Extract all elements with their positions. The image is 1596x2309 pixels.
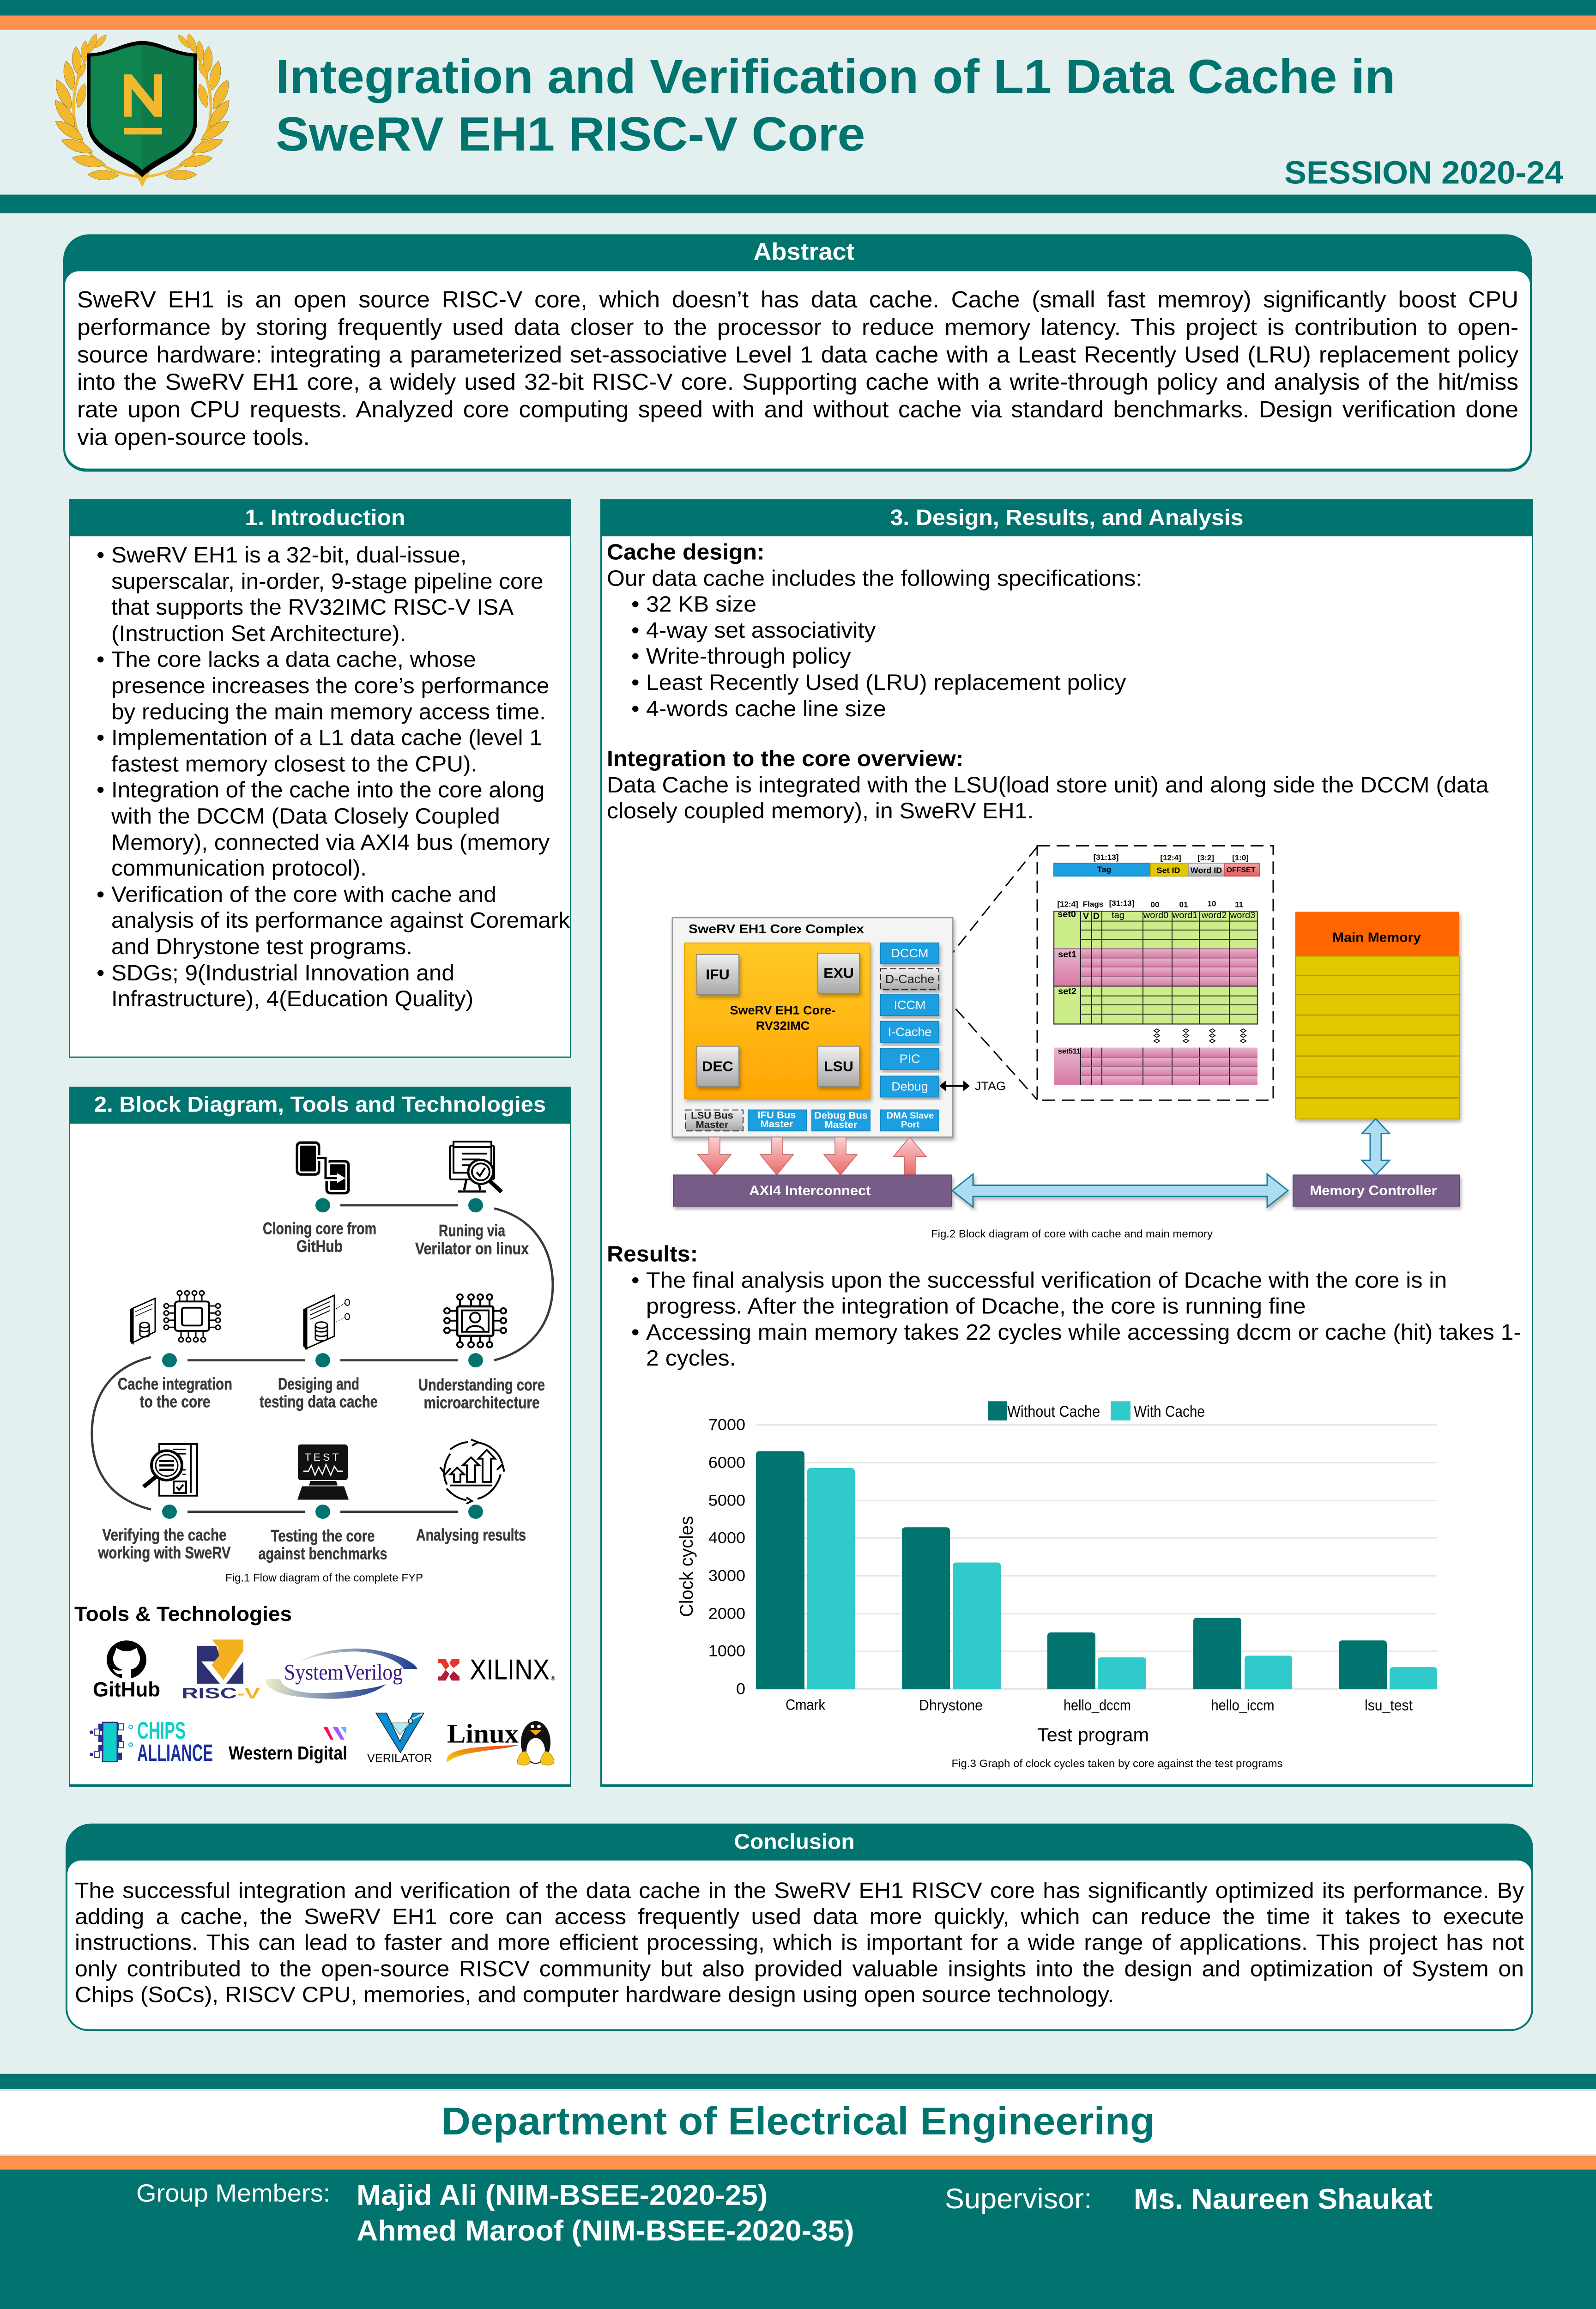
results text: Accessing main memory takes 22 cycles while accessing dccm or cache (hit) takes 1- bbox=[646, 1320, 1521, 1345]
functional units: EXU bbox=[823, 965, 854, 981]
bus master blocks bbox=[686, 1109, 939, 1131]
functional units: DEC bbox=[702, 1058, 733, 1074]
results text: The final analysis upon the successful verification of Dcache with the core is in bbox=[646, 1268, 1447, 1293]
logo: Verilator bbox=[367, 1713, 432, 1765]
cache address fields: Flags bbox=[1083, 900, 1103, 908]
cache table: set0 to set2: word2 bbox=[1201, 910, 1227, 920]
flow step labels: Verifying the cache bbox=[102, 1526, 226, 1544]
cache address fields: [12:4] bbox=[1057, 900, 1078, 908]
cache design text: Write-through policy bbox=[646, 644, 851, 669]
design heading: 3. Design, Results, and Analysis bbox=[890, 505, 1244, 530]
logo: CHIPS Alliance bbox=[90, 1717, 213, 1766]
block diagram heading bbox=[69, 1087, 571, 1124]
y axis labels: 5000 bbox=[708, 1492, 745, 1510]
cache table: set0 to set2: tag bbox=[1112, 910, 1124, 920]
introduction bullet list: and Dhrystone test programs. bbox=[111, 934, 412, 959]
integration overview text bbox=[607, 746, 1488, 824]
title: Integration and Verification of L1 Data Cache in bbox=[276, 49, 1395, 103]
logo: Verilator: VERILATOR bbox=[367, 1752, 432, 1765]
department title: Department of Electrical Engineering bbox=[441, 2099, 1155, 2143]
supervisor label: Supervisor: bbox=[945, 2183, 1092, 2215]
header band bbox=[0, 0, 1596, 213]
caption: figure 2: Fig.2 Block diagram of core with cache and main memory bbox=[931, 1228, 1213, 1239]
panel: 1. introduction bbox=[69, 499, 571, 1058]
cache address fields bbox=[1054, 853, 1259, 909]
logo: CHIPS Alliance: ALLIANCE bbox=[137, 1740, 213, 1766]
abstract text: source hardware: integrating a parameterized set-associative Level 1 data cache with a Least Recently Used (LRU) replacement policy bbox=[77, 342, 1518, 368]
x axis title: Test program bbox=[1037, 1724, 1149, 1745]
x axis labels: hello_dccm bbox=[1064, 1697, 1131, 1714]
bars: without cache bbox=[756, 1451, 1387, 1689]
introduction bullet list: that supports the RV32IMC RISC-V ISA bbox=[111, 595, 514, 620]
introduction bullet list: communication protocol). bbox=[111, 856, 367, 881]
bus master blocks: Port bbox=[901, 1120, 919, 1130]
bars: with cache bbox=[807, 1468, 1437, 1689]
cache design text: 4-words cache line size bbox=[646, 696, 886, 721]
footer bbox=[0, 2074, 1596, 2309]
cache address fields: 00 bbox=[1151, 901, 1159, 909]
results text: 2 cycles. bbox=[646, 1346, 736, 1371]
conclusion text: only contributed to the open-source RISCV community but also provided valuable insights into the design and optimization of System on bbox=[75, 1956, 1524, 1981]
introduction bullet list: Memory), connected via AXI4 bus (memory bbox=[111, 830, 550, 854]
cache table: set0 to set2 bbox=[1054, 909, 1257, 1024]
functional units: IFU bbox=[706, 967, 730, 983]
cache table: set0 to set2: set0 bbox=[1058, 909, 1076, 919]
core complex box: SweRV EH1 Core Complex bbox=[689, 922, 864, 936]
AXI4 interconnect block: AXI4 Interconnect bbox=[749, 1183, 871, 1198]
flow step labels: Cache integration bbox=[118, 1375, 232, 1393]
cache address fields: 01 bbox=[1179, 901, 1188, 909]
cache design text: Cache design: bbox=[607, 539, 765, 564]
header bottom teal bar bbox=[0, 194, 1596, 213]
tool logos bbox=[69, 1626, 568, 1773]
conclusion text bbox=[75, 1876, 1524, 2010]
memory and peripheral blocks: ICCM bbox=[894, 998, 925, 1012]
legend: With Cache bbox=[1134, 1402, 1205, 1420]
block diagram: core with cache and main memory bbox=[665, 837, 1478, 1247]
flow diagram bbox=[69, 1127, 568, 1586]
arrows: bus masters to AXI4 bbox=[698, 1137, 926, 1175]
abstract text: SweRV EH1 is an open source RISC-V core, which doesn’t has data cache. Cache (small fast memroy) significantly boost CPU bbox=[77, 286, 1518, 312]
abstract text bbox=[77, 285, 1518, 451]
results text: Results: bbox=[607, 1241, 698, 1266]
introduction bullet list: The core lacks a data cache, whose bbox=[111, 647, 476, 672]
cache address fields: [3:2] bbox=[1197, 853, 1214, 862]
introduction heading bbox=[69, 499, 571, 536]
department title box bbox=[0, 2091, 1596, 2156]
abstract body box bbox=[65, 271, 1530, 469]
icon: test monitor bbox=[297, 1445, 349, 1499]
x axis labels bbox=[786, 1697, 1413, 1714]
memory and peripheral blocks: Debug bbox=[891, 1080, 928, 1093]
introduction bullet list: analysis of its performance against Coremark bbox=[111, 908, 570, 933]
flow step labels: Testing the core bbox=[271, 1526, 375, 1545]
arrow: JTAG bbox=[939, 1079, 1006, 1093]
flow step labels: microarchitecture bbox=[423, 1393, 539, 1412]
memory and peripheral blocks: I-Cache bbox=[888, 1025, 931, 1039]
logo: CHIPS Alliance: CHIPS bbox=[137, 1717, 186, 1744]
department band bbox=[0, 2089, 1596, 2091]
y axis labels: 0 bbox=[736, 1680, 745, 1698]
bus master blocks: Debug Bus bbox=[814, 1110, 868, 1121]
introduction bullet list bbox=[111, 543, 570, 1012]
memory and peripheral blocks bbox=[881, 943, 939, 1097]
flow step labels: testing data cache bbox=[260, 1392, 378, 1411]
arrow: JTAG: JTAG bbox=[975, 1079, 1006, 1093]
flow connectors bbox=[92, 1205, 553, 1512]
cache address fields: [1:0] bbox=[1232, 853, 1249, 862]
cache table: set0 to set2: set2 bbox=[1058, 986, 1076, 997]
flow step labels: Verilator on linux bbox=[415, 1239, 529, 1258]
dashed zoom callout lines bbox=[943, 846, 1273, 1100]
logo: Linux: Linux bbox=[447, 1718, 519, 1748]
y axis labels: 3000 bbox=[708, 1567, 745, 1585]
panel: abstract bbox=[63, 234, 1532, 471]
cache design text: 4-way set associativity bbox=[646, 618, 876, 643]
logo: Western Digital bbox=[229, 1727, 347, 1764]
cache address fields: 11 bbox=[1235, 901, 1243, 909]
bus master blocks: LSU Bus bbox=[691, 1110, 733, 1121]
memory and peripheral blocks: D-Cache bbox=[885, 972, 934, 986]
conclusion heading: Conclusion bbox=[734, 1830, 855, 1854]
introduction bullet list: Integration of the cache into the core along bbox=[111, 778, 544, 802]
logo: Xilinx bbox=[438, 1654, 555, 1686]
flow step labels: working with SweRV bbox=[98, 1543, 231, 1562]
block diagram heading: 2. Block Diagram, Tools and Technologies bbox=[94, 1093, 546, 1117]
main memory block: Main Memory bbox=[1332, 930, 1421, 945]
introduction bullet list: by reducing the main memory access time. bbox=[111, 700, 546, 724]
footer orange stripe bbox=[0, 2156, 1596, 2170]
cache design text: 32 KB size bbox=[646, 592, 756, 617]
logo: SystemVerilog: SystemVerilog bbox=[284, 1660, 403, 1685]
logo: SystemVerilog bbox=[266, 1649, 417, 1699]
orange core block: RV32IMC bbox=[756, 1019, 810, 1033]
supervisor name: Ms. Naureen Shaukat bbox=[1134, 2183, 1433, 2215]
flow step labels: against benchmarks bbox=[259, 1544, 387, 1563]
icon: verification document bbox=[144, 1444, 197, 1496]
title: SweRV EH1 RISC-V Core bbox=[276, 107, 865, 161]
logo: GitHub bbox=[93, 1640, 160, 1701]
group member names: Majid Ali (NIM-BSEE-2020-25) bbox=[357, 2179, 768, 2211]
flow step dots bbox=[162, 1198, 483, 1519]
top teal stripe bbox=[0, 0, 1596, 16]
icon: test monitor: TEST bbox=[305, 1452, 341, 1463]
logo: Western Digital: Western Digital bbox=[229, 1743, 347, 1764]
y axis title: Clock cycles bbox=[677, 1516, 697, 1617]
cache table: set0 to set2: V bbox=[1083, 911, 1089, 921]
flow step labels: Runing via bbox=[439, 1221, 506, 1240]
cache table: set511: set511 bbox=[1058, 1048, 1081, 1056]
flow step labels: Cloning core from bbox=[263, 1219, 376, 1238]
cache design text: Our data cache includes the following specifications: bbox=[607, 566, 1142, 591]
conclusion text: adding a cache, the SweRV EH1 core can access frequently used data more quickly, which can reduce the time it takes to execute bbox=[75, 1904, 1524, 1929]
bar chart: clock cycles by test program bbox=[670, 1394, 1501, 1777]
functional units bbox=[697, 953, 859, 1086]
cache table: set511 bbox=[1054, 1048, 1257, 1085]
introduction bullet list: Verification of the core with cache and bbox=[111, 882, 496, 907]
cache design text bbox=[607, 539, 1142, 722]
legend bbox=[988, 1401, 1205, 1420]
icon: analysing results bbox=[440, 1439, 504, 1504]
x axis labels: Dhrystone bbox=[919, 1697, 983, 1714]
x axis labels: lsu_test bbox=[1365, 1697, 1413, 1714]
bus master blocks: Master bbox=[696, 1119, 729, 1130]
cache address fields: 10 bbox=[1208, 900, 1216, 908]
abstract text: rate upon CPU requests. Analyzed core computing speed with and without cache via standard benchmarks. Design verification done bbox=[77, 396, 1518, 422]
logo: Linux bbox=[447, 1718, 554, 1765]
introduction bullet list: SweRV EH1 is a 32-bit, dual-issue, bbox=[111, 543, 466, 568]
cache address fields: Set ID bbox=[1157, 866, 1180, 875]
arrow: AXI4 to memory controller bbox=[952, 1174, 1288, 1207]
logo: RISC-V: RISC -V bbox=[181, 1685, 260, 1702]
group member names bbox=[357, 2177, 854, 2249]
integration overview text: Data Cache is integrated with the LSU(load store unit) and along side the DCCM (data bbox=[607, 772, 1488, 797]
flow step labels: to the core bbox=[139, 1392, 211, 1411]
bus master blocks: Master bbox=[761, 1118, 793, 1130]
functional units: LSU bbox=[824, 1058, 853, 1074]
introduction bullet list: with the DCCM (Data Closely Coupled bbox=[111, 804, 500, 828]
logo: GitHub: GitHub bbox=[93, 1678, 160, 1701]
flow step labels: Analysing results bbox=[416, 1526, 526, 1544]
y axis labels: 7000 bbox=[708, 1416, 745, 1434]
title bbox=[276, 48, 1395, 163]
orange core block: SweRV EH1 Core- bbox=[730, 1003, 835, 1017]
tools and technologies heading: Tools & Technologies bbox=[74, 1602, 292, 1625]
abstract heading: Abstract bbox=[753, 238, 855, 265]
cache design text: Least Recently Used (LRU) replacement policy bbox=[646, 670, 1126, 695]
flow step labels: Desiging and bbox=[278, 1375, 359, 1393]
abstract text: via open-source tools. bbox=[77, 424, 310, 450]
top orange stripe bbox=[0, 16, 1596, 30]
abstract text: into the SweRV EH1 core, a widely used 32-bit RISC-V core. Supporting cache with a write-through policy and analysis of the hit/miss bbox=[77, 369, 1518, 395]
memory controller block: Memory Controller bbox=[1310, 1183, 1437, 1198]
panel: 3. design, results and analysis bbox=[600, 499, 1533, 1787]
cache address fields: Tag bbox=[1097, 865, 1111, 874]
introduction bullet list: Implementation of a L1 data cache (level 1 bbox=[111, 725, 542, 750]
logo: Xilinx: XILINX bbox=[470, 1654, 550, 1686]
x axis labels: Cmark bbox=[786, 1697, 825, 1713]
y axis labels bbox=[708, 1416, 745, 1698]
memory and peripheral blocks: DCCM bbox=[891, 946, 928, 960]
icon: monitor with magnifier bbox=[450, 1142, 502, 1192]
cache address fields: Word ID bbox=[1191, 866, 1222, 875]
panel: 2. block diagram, tools and technologies bbox=[69, 1087, 571, 1787]
icon: cache document bbox=[304, 1295, 350, 1349]
cache table: set0 to set2: set1 bbox=[1058, 949, 1076, 960]
group member names: Ahmed Maroof (NIM-BSEE-2020-35) bbox=[357, 2215, 854, 2247]
results text: progress. After the integration of Dcache, the core is running fine bbox=[646, 1294, 1306, 1318]
abstract text: performance by storing frequently used data closer to the processor to reduce memory latency. This project is contribution to open- bbox=[77, 314, 1518, 340]
cache table: set0 to set2: D bbox=[1093, 911, 1100, 921]
icon: cache document with chip bbox=[131, 1291, 220, 1343]
core complex box bbox=[672, 918, 953, 1137]
conclusion text: The successful integration and verification of the data cache in the SweRV EH1 RISCV core has significantly optimized its performance. By bbox=[75, 1878, 1524, 1903]
flow step labels bbox=[98, 1219, 545, 1563]
cache table: set0 to set2: word3 bbox=[1230, 910, 1255, 920]
arrow: memory controller to main memory bbox=[1362, 1119, 1390, 1175]
cache address fields: [12:4] bbox=[1160, 853, 1181, 862]
logo: shield with laurel wreath bbox=[46, 31, 240, 196]
icon: chip with person bbox=[444, 1294, 506, 1348]
bus master blocks: DMA Slave bbox=[887, 1111, 934, 1121]
logo: Xilinx: ® bbox=[551, 1676, 555, 1682]
session label: SESSION 2020-24 bbox=[1284, 155, 1563, 191]
introduction bullet list: fastest memory closest to the CPU). bbox=[111, 752, 477, 776]
cache address fields: [31:13] bbox=[1094, 853, 1118, 862]
integration overview text: Integration to the core overview: bbox=[607, 746, 963, 771]
AXI4 interconnect block bbox=[673, 1175, 951, 1206]
cache address fields: OFFSET bbox=[1226, 866, 1256, 874]
introduction bullet list: presence increases the core’s performance bbox=[111, 673, 549, 698]
caption: figure 3: Fig.3 Graph of clock cycles taken by core against the test programs bbox=[951, 1758, 1282, 1769]
icon: git clone bbox=[296, 1142, 349, 1194]
introduction bullet list: Infrastructure), 4(Education Quality) bbox=[111, 986, 473, 1011]
conclusion text: Chips (SoCs), RISCV CPU, memories, and computer hardware design using open source technology. bbox=[75, 1982, 1114, 2007]
introduction bullet list: SDGs; 9(Industrial Innovation and bbox=[111, 961, 454, 985]
conclusion body box bbox=[67, 1861, 1531, 2029]
memory controller block bbox=[1293, 1175, 1459, 1206]
cache table: set0 to set2: word0 bbox=[1143, 910, 1168, 920]
y axis labels: 2000 bbox=[708, 1605, 745, 1623]
memory and peripheral blocks: PIC bbox=[900, 1052, 920, 1065]
orange core block bbox=[684, 943, 870, 1098]
main memory block bbox=[1295, 912, 1459, 1119]
y axis labels: 6000 bbox=[708, 1454, 745, 1472]
flow step labels: GitHub bbox=[296, 1237, 343, 1256]
introduction heading: 1. Introduction bbox=[245, 505, 405, 530]
ellipsis diamonds bbox=[1154, 1029, 1246, 1043]
introduction bullet list: superscalar, in-order, 9-stage pipeline core bbox=[111, 569, 544, 593]
introduction bullet list: (Instruction Set Architecture). bbox=[111, 621, 406, 646]
y axis labels: 1000 bbox=[708, 1642, 745, 1660]
integration overview text: closely coupled memory), in SweRV EH1. bbox=[607, 798, 1034, 823]
bus master blocks: Master bbox=[825, 1119, 858, 1130]
logo: RISC-V bbox=[181, 1639, 260, 1702]
cache address fields: [31:13] bbox=[1109, 899, 1134, 907]
results text bbox=[607, 1241, 1521, 1372]
legend: Without Cache bbox=[1007, 1402, 1100, 1420]
caption: figure 1: Fig.1 Flow diagram of the complete FYP bbox=[225, 1572, 423, 1584]
panel: conclusion bbox=[66, 1824, 1533, 2031]
x axis labels: hello_iccm bbox=[1211, 1697, 1275, 1714]
design heading bbox=[600, 499, 1533, 536]
conclusion text: instructions. This can lead to faster and more efficient processing, which is important for a wide range of applications. This project has not bbox=[75, 1930, 1524, 1955]
cache table: set0 to set2: word1 bbox=[1172, 910, 1197, 920]
y axis labels: 4000 bbox=[708, 1529, 745, 1547]
bus master blocks: IFU Bus bbox=[757, 1109, 796, 1120]
group members label: Group Members: bbox=[136, 2179, 330, 2207]
